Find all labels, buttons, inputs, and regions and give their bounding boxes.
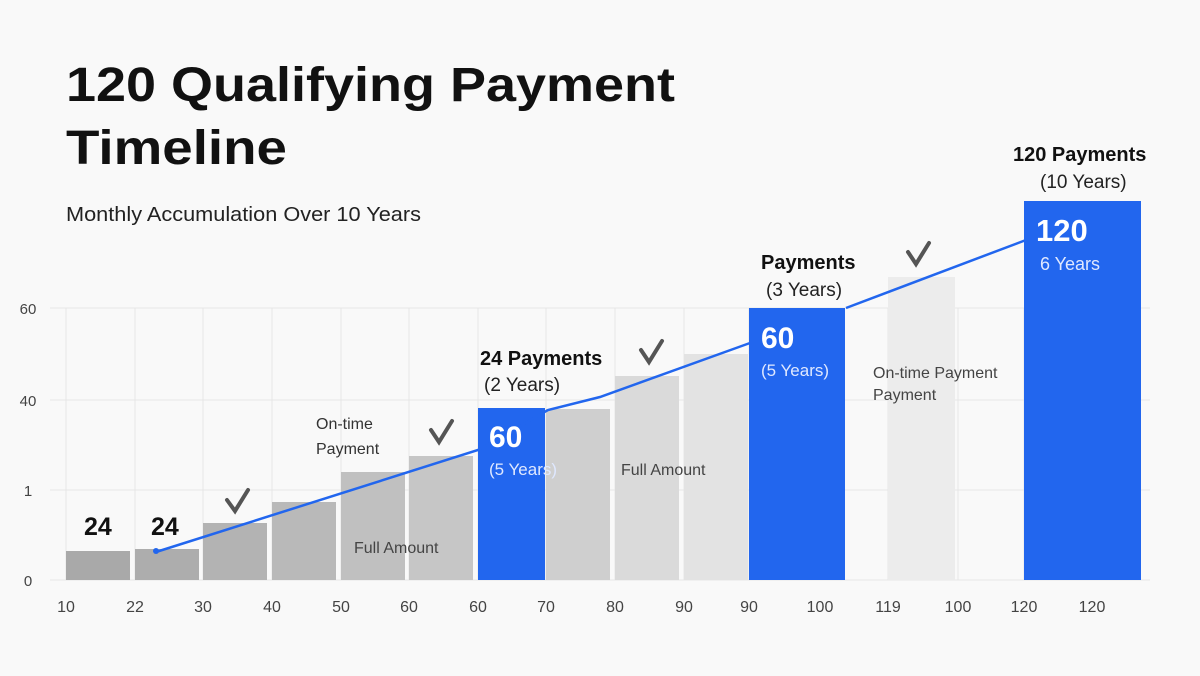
bar labels: (10 Years)	[1040, 172, 1127, 193]
x axis labels: 119	[875, 599, 901, 616]
x axis labels: 100	[945, 599, 971, 616]
bar labels: 24	[84, 513, 112, 541]
x axis labels: 90	[740, 599, 758, 616]
y axis labels: 1	[24, 483, 32, 500]
checkmarks	[227, 243, 929, 511]
x axis labels: 40	[263, 599, 281, 616]
bar labels: 120	[1036, 213, 1088, 248]
x axis labels: 30	[194, 599, 212, 616]
bar labels: Full Amount	[354, 540, 439, 557]
x axis labels: 50	[332, 599, 350, 616]
chart	[20, 144, 1150, 616]
blue bars	[478, 201, 1141, 580]
x axis labels: 120	[1079, 599, 1105, 616]
x axis labels: 70	[537, 599, 555, 616]
bar labels: 60	[761, 322, 794, 355]
bar labels: Payment	[316, 441, 380, 458]
bar labels: On-time Payment	[873, 365, 998, 382]
bar labels: (3 Years)	[766, 280, 842, 301]
bar labels: On-time	[316, 416, 373, 433]
bar labels: Payments	[761, 252, 856, 274]
bar labels: Payment	[873, 387, 937, 404]
x axis labels: 80	[606, 599, 624, 616]
title: Timeline	[66, 122, 287, 175]
x axis labels: 10	[57, 599, 75, 616]
bar labels: Full Amount	[621, 462, 706, 479]
y axis labels: 60	[20, 301, 36, 318]
bar labels: 6 Years	[1040, 254, 1100, 274]
bar labels: 24 Payments	[480, 348, 602, 370]
bar labels: 120 Payments	[1013, 144, 1146, 166]
subtitle: Monthly Accumulation Over 10 Years	[66, 204, 421, 226]
trend line	[156, 343, 750, 552]
x axis labels: 60	[400, 599, 418, 616]
x axis labels: 120	[1011, 599, 1037, 616]
y axis labels	[20, 301, 36, 590]
x axis labels: 60	[469, 599, 487, 616]
y axis labels: 0	[24, 573, 32, 590]
bar labels: 24	[151, 513, 179, 541]
bar labels: (5 Years)	[489, 460, 557, 479]
bar labels	[84, 144, 1146, 557]
x axis labels: 100	[807, 599, 833, 616]
bar labels: 60	[489, 421, 522, 454]
y axis labels: 40	[20, 393, 36, 410]
bar labels: (5 Years)	[761, 361, 829, 380]
x axis labels	[57, 599, 1105, 616]
x axis labels: 22	[126, 599, 144, 616]
title: 120 Qualifying Payment	[66, 59, 675, 112]
title	[66, 59, 675, 175]
bar labels: (2 Years)	[484, 375, 560, 396]
gray bars	[66, 277, 955, 580]
x axis labels: 90	[675, 599, 693, 616]
